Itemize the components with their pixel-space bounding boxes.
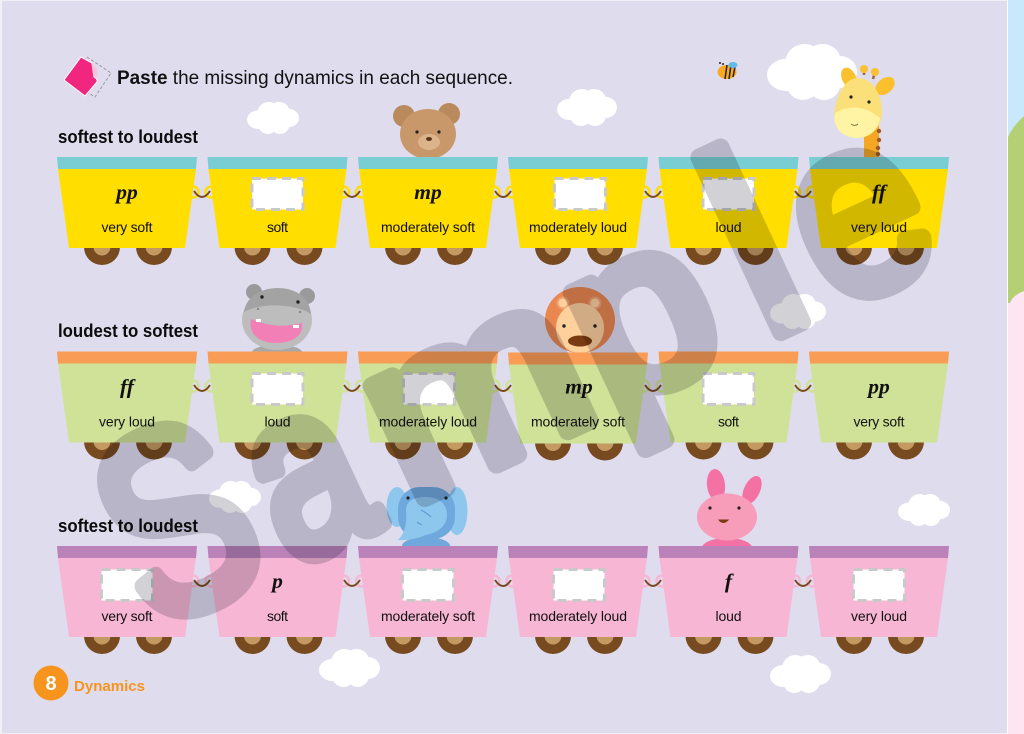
car: p soft xyxy=(208,546,348,654)
watermark: l xyxy=(663,97,842,391)
car: moderately loud xyxy=(508,157,648,265)
car: mp moderately soft: moderately soft xyxy=(381,219,475,235)
car: moderately soft xyxy=(358,546,498,654)
car: ff very loud: ff xyxy=(120,374,136,398)
car: pp very soft xyxy=(809,352,949,460)
car: ff very loud: ff xyxy=(872,180,888,204)
watermark: m xyxy=(320,222,626,551)
car: loud: loud xyxy=(264,414,290,430)
car: moderately loud: moderately loud xyxy=(379,414,477,430)
animal: lion xyxy=(545,287,615,353)
car: ff very loud: very loud xyxy=(99,414,155,430)
car: p soft: soft xyxy=(267,608,288,624)
car: mp moderately soft: moderately soft xyxy=(531,414,625,430)
car: loud xyxy=(658,157,798,265)
heading: row 2: loudest to softest xyxy=(58,321,198,341)
train row 2 xyxy=(57,352,949,460)
car: pp very soft: very soft xyxy=(854,414,905,430)
page number xyxy=(34,666,68,700)
car: moderately loud: moderately loud xyxy=(529,608,627,624)
car: soft: soft xyxy=(267,219,288,235)
animal: giraffe xyxy=(834,65,898,158)
heading: row 3: softest to loudest xyxy=(58,516,198,536)
watermark: e xyxy=(739,54,970,359)
car: pp very soft: pp xyxy=(866,374,890,398)
icon: bee xyxy=(718,62,738,79)
car: loud xyxy=(208,352,348,460)
train row 1 xyxy=(57,157,949,265)
car: f loud xyxy=(658,546,798,654)
car: very soft xyxy=(57,546,197,654)
animal: hippo xyxy=(242,284,315,359)
clouds xyxy=(209,44,950,693)
couplers row 3 xyxy=(188,576,818,586)
car: pp very soft: very soft xyxy=(102,219,153,235)
car: pp very soft xyxy=(57,157,197,265)
car: loud: loud xyxy=(716,219,742,235)
animal: bear xyxy=(393,103,460,159)
couplers row 2 xyxy=(188,380,818,392)
car: very loud: very loud xyxy=(851,608,907,624)
watermark: S xyxy=(53,361,300,680)
car: mp moderately soft xyxy=(508,352,648,460)
animal: bunny xyxy=(697,468,766,558)
car: soft xyxy=(208,157,348,265)
watermark: p xyxy=(520,161,755,457)
car: mp moderately soft: mp xyxy=(414,180,442,204)
car: f loud: f xyxy=(725,569,734,593)
car: moderately soft: moderately soft xyxy=(381,608,475,624)
side tabs xyxy=(1007,0,1024,734)
car: mp moderately soft: mp xyxy=(565,374,593,398)
car: ff very loud: very loud xyxy=(851,219,907,235)
couplers row 1 xyxy=(188,186,818,198)
car: p soft: p xyxy=(270,569,283,593)
car: very soft: very soft xyxy=(102,608,153,624)
car: very loud xyxy=(809,546,949,654)
car: mp moderately soft xyxy=(358,157,498,265)
heading: row 1: softest to loudest xyxy=(58,127,198,147)
car: soft xyxy=(658,352,798,460)
icon: paste xyxy=(64,57,111,97)
train row 3 xyxy=(57,546,949,654)
car: f loud: loud xyxy=(716,608,742,624)
page number: 8 xyxy=(45,673,57,695)
watermark: a xyxy=(199,325,407,613)
page label: Dynamics xyxy=(74,678,145,695)
car: ff very loud xyxy=(809,157,949,265)
car: soft: soft xyxy=(718,414,739,430)
title: Paste the missing dynamics in each sequence. xyxy=(117,68,513,89)
car: pp very soft: pp xyxy=(114,180,138,204)
car: moderately loud xyxy=(358,352,498,460)
car: ff very loud xyxy=(57,352,197,460)
car: moderately loud xyxy=(508,546,648,654)
car: moderately loud: moderately loud xyxy=(529,219,627,235)
watermark xyxy=(48,38,971,680)
animal: elephant xyxy=(386,487,468,555)
